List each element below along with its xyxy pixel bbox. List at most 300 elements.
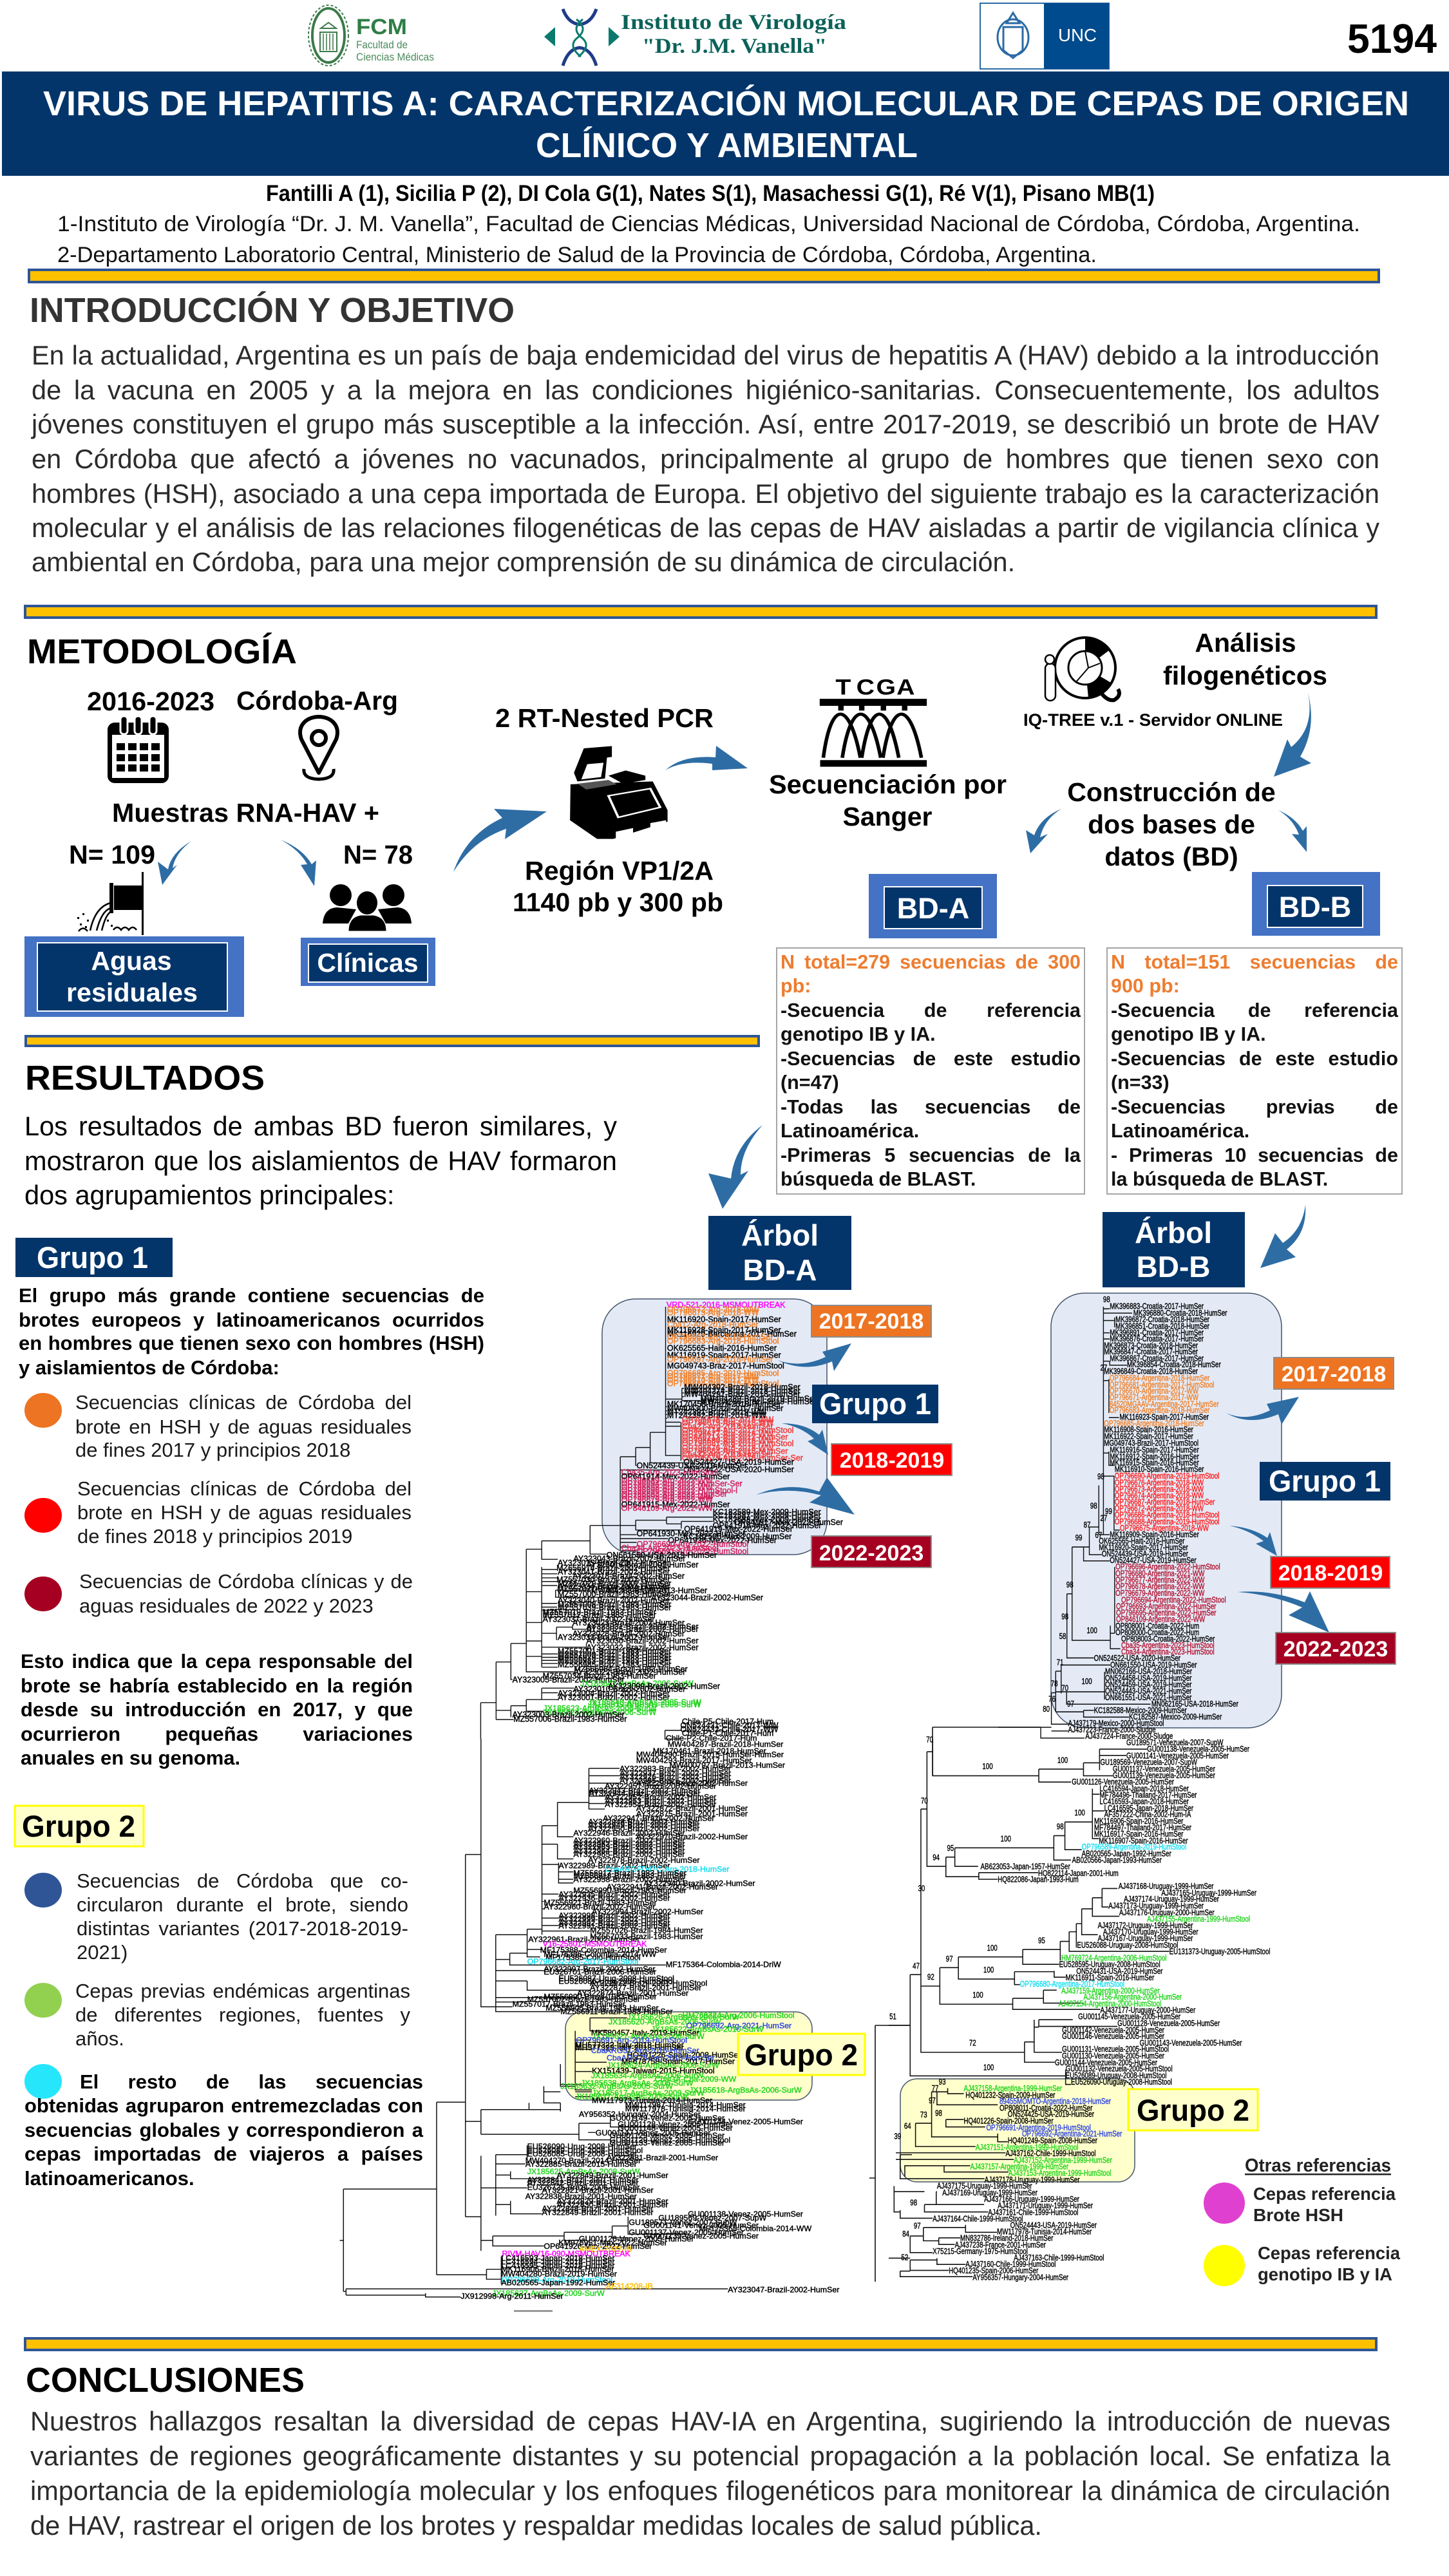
tree: BD-B phylogeny: 67 [1095, 1530, 1102, 1540]
tree: BD-A phylogeny: OP796689-Arg-2022-WW [621, 1476, 713, 1485]
text: legend cyan remainder [24, 2070, 424, 2190]
tree: BD-A phylogeny: AY323004-Brazil-2002-HumSer [558, 1689, 670, 1698]
label: samples: Muestras RNA-HAV + [112, 798, 379, 828]
tree: BD-A phylogeny: MW404290-Brazil-2015-HumSer-HumSer [636, 1750, 784, 1759]
text: legend red: Secuencias clínicas de Córdoba del [77, 1477, 412, 1500]
tree: BD-B phylogeny: AJ437162-Chile-1999-HumStool [1005, 2149, 1096, 2158]
tree: BD-A phylogeny: OP796685-Arg-2019-HumStool [667, 1369, 779, 1378]
tree: BD-B phylogeny: 95 [947, 1844, 954, 1853]
tree: BD-A phylogeny: JX185625-ArgBsAs-2008-SurW [527, 2167, 640, 2176]
divider bar 2 [25, 606, 1376, 618]
tree: BD-A phylogeny: AY322940-Brazil-2002-HumSer [643, 1879, 755, 1888]
tree: BD-B phylogeny: GU001139-Venezuela-2005-HumSer [1113, 1770, 1215, 1780]
tree: BD-A phylogeny: MZ556911-Brazil-1983-HumSer [560, 2007, 673, 2016]
tree: BD-B phylogeny: OP796696-Argentina-2022-HumStool [1115, 1562, 1220, 1572]
title banner: CLÍNICO Y AMBIENTAL [536, 126, 918, 165]
tree: BD-A phylogeny: OP641919-Mex-2022-HumSer [684, 1525, 793, 1534]
tree: BD-B phylogeny: MK116911-Spain-2016-HumSer [1066, 1973, 1154, 1982]
box: BD-A [869, 874, 997, 938]
tree: BD-B phylogeny: AB020566-Japan-1993-HumSer [1072, 1855, 1162, 1865]
tree: BD-A phylogeny: MK116920-Spain-2017-HumSer [667, 1315, 781, 1324]
tree: BD-B phylogeny: MF784497-Thailand-2017-HumSer [1094, 1823, 1191, 1832]
tree: BD-A phylogeny: OP796679-Arg-2022-WW [621, 1495, 713, 1504]
title box: arbol BD-A: BD-A [743, 1253, 817, 1287]
tree: BD-A phylogeny: MH577323-Italy-2018-HumSer [575, 2043, 684, 2052]
badge: grupo 1 left [15, 1238, 173, 1277]
tree: BD-B phylogeny: EU526090-Uruguay-2008-HumStool [1071, 2078, 1172, 2087]
icon: Sanger chromatogram [820, 675, 927, 767]
title banner [2, 71, 1449, 176]
tree: BD-A phylogeny: Chile-P2-Chile-2017-Hum [666, 1734, 757, 1743]
tree: BD-A phylogeny: MF678758-Spain-2017-HumSer [621, 2057, 735, 2066]
tree: BD-A phylogeny: VRD-521-2016-MSMOUTBREAK [667, 1300, 786, 1309]
panel: BD-B description [1106, 947, 1403, 1195]
label: construccion [1067, 777, 1276, 871]
tree: BD-A phylogeny: OP796680-Arg-2018-WW [682, 1436, 774, 1445]
tree: BD-B phylogeny: 100 [987, 1943, 998, 1953]
badge: 2017-2018 tree A [811, 1305, 931, 1337]
box: BD-B: BD-B [1279, 891, 1351, 923]
panel: BD-A description: -Todas las secuencias de [781, 1096, 1081, 1118]
text: conclusiones: importancia de la epidemiología molecular y los enfoques filogenéticos para monitorear la dinámica de circulación [30, 2476, 1390, 2506]
tree: BD-A phylogeny: MZ556918-Brazil-1983-HumSer [573, 1871, 687, 1880]
tree: BD-B phylogeny: MK116908-Spain-2016-HumSer [1104, 1425, 1193, 1435]
tree: BD-B phylogeny: OP796670-Argentina-2017-WW [1110, 1386, 1198, 1396]
tree: BD-A phylogeny: MZ557012-Brazil-1983-HumSer [543, 1611, 656, 1620]
tree: BD-A phylogeny: MF175385-Colo-HumStool [545, 1953, 640, 1962]
tree: BD-A phylogeny: OP796698-Arg-2022-WW [621, 1483, 713, 1492]
tree: BD-A phylogeny: AY322948-Brazil-2002-HumSer [588, 1817, 699, 1826]
text: legend dark red: Secuencias de Córdoba clínicas y de [79, 1570, 413, 1593]
arrow: analysis to databases [1274, 693, 1311, 777]
tree: BD-A phylogeny: AY322937-Brazil-2002-HumSer [620, 1768, 731, 1777]
tree: BD-A phylogeny: MW404288-Brazil-2019-HumSer [701, 1397, 817, 1406]
text: introduccion: En la actualidad, Argentina es un país de baja endemicidad del virus de hepatitis A (HAV) debido a la introducción [32, 340, 1379, 370]
text: introduccion: ambiental en Córdoba, para una mejor comprensión de su dinámica de circulación. [32, 547, 1015, 577]
tree: BD-B phylogeny: 95 [1038, 1936, 1045, 1946]
legend: otras referencias: Cepas referencia [1258, 2243, 1400, 2263]
tree: BD-B phylogeny: GU001130-Venezuela-2005-HumSer [1062, 2051, 1164, 2061]
tree: BD-A phylogeny: JX185640-ArgBsAs-2005-SurW [588, 1698, 701, 1707]
tree: BD-B phylogeny: 98 [1057, 1822, 1064, 1832]
text: legend red [77, 1477, 412, 1548]
tree: BD-B phylogeny: ON661551-USA-2021-HumSer [1105, 1693, 1192, 1702]
tree: BD-A phylogeny: AY323028-Brazil-2002-HumSer [573, 1629, 685, 1638]
tree: BD-A phylogeny: OP641936-Mex-2022-HumSer [668, 1536, 777, 1545]
panel: BD-A description: -Primeras 5 secuencias de la [781, 1144, 1081, 1166]
arrow: to wastewater [158, 841, 191, 885]
tree: BD-B phylogeny: OP796692-Argentina-2021-HumSer [1022, 2129, 1122, 2139]
tree: BD-B phylogeny: 47 [913, 1962, 920, 1971]
text: legend red: brote en HSH y de aguas residuales [77, 1501, 412, 1524]
tree: BD-A phylogeny: MW404280-Brazil-2019-HumSer [501, 2269, 617, 2278]
tree: BD-A phylogeny: MK116929-Barcelona-2017-HumSer [667, 1329, 797, 1338]
tree: BD-A phylogeny: AF314208-IB [606, 2282, 653, 2291]
tree: BD-B phylogeny: 70 [921, 1796, 928, 1806]
tree: BD-B phylogeny: AJ437158-Argentina-1999-HumSer [964, 2084, 1062, 2093]
tree: BD-A phylogeny: OK625565-Haiti-2016-HumSer [667, 1343, 777, 1352]
tree: BD-A phylogeny: GU001149-Venez-2005-HumSer [610, 2114, 724, 2123]
text: legend green: Cepas previas endémicas argentinas [75, 1980, 410, 2002]
tree: BD-A phylogeny: MZ556905-Brazil-1983-HumSer [545, 2003, 659, 2012]
icon: wastewater pipe [77, 872, 144, 935]
tree: BD-A phylogeny: KC182587-Mex-2009-HumSer [713, 1511, 821, 1520]
tree: BD-A phylogeny: KX151439-Taiwan-2015-HumStool [592, 2066, 715, 2075]
box: aguas residuales: residuales [66, 978, 198, 1007]
title box: arbol BD-A: Árbol [741, 1218, 819, 1252]
tree: BD-A phylogeny: OP796689-Arg-2019-HumStool [501, 2275, 612, 2284]
tree: BD-A phylogeny: JX185624-ArgBsAs-2006-SurW [607, 2061, 719, 2070]
legend dot: cyan [24, 2064, 62, 2099]
tree: BD-A phylogeny: AY322947-Brazil-2002-HumSer [603, 1814, 714, 1823]
tree: BD-B phylogeny: ON661550-USA-2019-HumSer [1110, 1660, 1197, 1670]
tree: BD-A phylogeny: CbaGA-Cba-2009-WW [655, 2075, 736, 2084]
tree: BD-A phylogeny: KM975951-Mex-2022-HumSer [558, 2238, 667, 2247]
tree: BD-A phylogeny: MZ557000-Brazil-1983-HumSer [558, 1590, 671, 1599]
tree: BD-A phylogeny: MZ557001-Brazil-1983-HumSer [558, 1647, 671, 1656]
tree: BD-B phylogeny: AJ437172-Uruguay-1999-HumSer [1098, 1920, 1193, 1930]
badge: grupo 1 left: Grupo 1 [37, 1240, 148, 1274]
tree: BD-A phylogeny: LC416595-Japan-2018-HumSer [501, 2261, 614, 2270]
badge: 2017-2018 tree B [1274, 1358, 1394, 1389]
tree: BD-B phylogeny: HQ401249-Spain-2008-HumSer [1008, 2136, 1097, 2145]
tree: BD-B phylogeny: 99 [1075, 1533, 1082, 1543]
tree: BD-A phylogeny: JX185638-ArgBsAs-2006-SurW [581, 2078, 694, 2087]
tree: BD-A phylogeny: AY322997-Brazil-2002-HumSer [544, 1965, 656, 1974]
tree: BD-B phylogeny: KC182587-Mexico-2009-HumSer [1129, 1712, 1222, 1722]
tree: BD-B phylogeny: MN062165-USA-2018-HumSer [1151, 1700, 1238, 1709]
tree: BD-A phylogeny: AY323025-Brazil-2002-HumSer [587, 1625, 699, 1634]
label: location: Córdoba-Arg [236, 686, 398, 715]
legend: otras referencias: genotipo IB y IA [1258, 2264, 1392, 2284]
tree: BD-A phylogeny: MF175386-Colombia-2014-WW [544, 1950, 656, 1959]
tree: BD-B phylogeny: 78 [1051, 1679, 1058, 1689]
label: RT-Nested PCR: 2 RT-Nested PCR [495, 703, 714, 733]
tree: BD-A phylogeny: AY323043-Brazil-2002-HumSer [573, 1555, 685, 1564]
tree: BD-B phylogeny: 97 [946, 1955, 953, 1964]
tree: BD-A phylogeny: JX185627-ArgBsAs-2009-SurW [492, 2289, 605, 2298]
tree: BD-A phylogeny: HQ401226-Spain-2008-HumSer [627, 2050, 741, 2060]
legend dot: red [24, 1498, 62, 1533]
tree: BD-B phylogeny: 98 [1103, 1294, 1110, 1304]
tree: BD-B phylogeny: OP796679-Argentina-2022-WW [1115, 1588, 1204, 1598]
tree: BD-A phylogeny: OP796684-Arg-2018-HumSer [682, 1447, 788, 1456]
tree: BD-B phylogeny: OP796681-Argentina-2017-HumStool [1110, 1380, 1214, 1390]
panel: BD-A description: pb: [781, 975, 811, 997]
arrow: tree A to 2022-2023 [756, 1477, 855, 1515]
arrow: tree B to 2018-2019 [1229, 1526, 1277, 1556]
tree: BD-A phylogeny: GU001129-Venez-2005-HumSer [610, 2131, 724, 2140]
divider bar 4 [25, 2338, 1376, 2350]
tree: BD-A phylogeny: GU001148-Venez-2005-HumSer [618, 2123, 733, 2132]
tree: BD-A phylogeny: MZ556917-Brazil-1983-HumSer [573, 1868, 687, 1877]
tree: BD-B phylogeny: AJ437238-France-2001-HumSer [955, 2240, 1046, 2249]
panel: BD-A description: N total=279 secuencias de 300 [781, 951, 1081, 973]
tree: BD-A phylogeny: GU001133-Venez-2005-HumSer [610, 2138, 724, 2147]
arrow: tree A to 2018-2019 [782, 1423, 828, 1455]
tree: BD-A phylogeny: OP796676-Arg-2018-WW [682, 1443, 774, 1452]
tree: BD-A phylogeny: AY322972-Brazil-2001-HumStool [590, 1978, 707, 1987]
tree: BD-A phylogeny: MZ556983-Brazil-1983-HumSer [558, 1656, 671, 1665]
tree: BD-A phylogeny: GU001144-Venez-2005-HumSer [688, 2117, 803, 2126]
tree: BD-A phylogeny: AY323040-Brazil-2002-HumSer [558, 1596, 670, 1605]
legend dot: green [24, 1983, 62, 2018]
legend dot: orange [24, 1393, 62, 1428]
tree: BD-B phylogeny: 84 [902, 2230, 909, 2239]
tree: BD-B phylogeny: 98 [935, 2108, 942, 2118]
tree: BD-A phylogeny: MF175388-Colombia-2014-HumSer [540, 1946, 667, 1955]
tree: BD-A phylogeny: MW404283-Brazil-2013-HumSer [591, 1586, 707, 1595]
tree: BD-B phylogeny: MK116922-Spain-2017-HumSer [1104, 1432, 1193, 1441]
tree: BD-A phylogeny: GU001141-Venez-2005-HumSer [643, 2221, 759, 2230]
heading: introduccion: INTRODUCCIÓN Y OBJETIVO [30, 291, 515, 330]
tree: BD-A phylogeny: AY322875-Brazil-2001-HumSer [636, 1810, 748, 1819]
tree: BD-A phylogeny: LC416593-Japan-2018-HumSer [501, 2253, 614, 2262]
highlight: grupo 2 region tree B [900, 2079, 1135, 2182]
tree: BD-A phylogeny: AY322965-Brazil-2002-HumSer [573, 1850, 685, 1859]
tree: BD-A phylogeny: AY322935-Brazil-2002-HumSer [558, 1890, 670, 1899]
text: introduccion [31, 340, 1379, 577]
tree: BD-A phylogeny: AY322849-Brazil-2001-HumSer [556, 2171, 668, 2180]
tree: BD-B phylogeny: GU001145-Venezuela-2005-HumSer [1078, 2012, 1180, 2022]
tree: BD-A phylogeny: AY323005-Brazil-2002-HumSer [513, 1676, 625, 1685]
arrow: panel B to tree B [1260, 1205, 1305, 1268]
tree: BD-B phylogeny: GU001143-Venezuela-2005-HumSer [1140, 2038, 1242, 2048]
tree: BD-A phylogeny: AY322961-Brazil-2002-HumSer [528, 1935, 639, 1944]
tree: BD-A phylogeny: MK170458-Brazil-2018-HumSer [667, 1399, 781, 1408]
tree: BD-A phylogeny: AY322950-Brazil-2002-HumSer [588, 1824, 699, 1833]
tree: BD-A phylogeny: OP641917-Mex-2022-HumSer [734, 1518, 843, 1527]
text: resultados intro: Los resultados de ambas BD fueron similares, y [24, 1111, 617, 1141]
label: IQ-TREE: IQ-TREE v.1 - Servidor ONLINE [1023, 710, 1283, 730]
tree: BD-A phylogeny: AY322946-Brazil-2002-HumSer [573, 1828, 685, 1837]
text: legend cyan remainder: cepas importadas de viajeros a países [24, 2143, 423, 2165]
text: grupo 1 description [19, 1284, 484, 1379]
tree: BD-A phylogeny: MZ557017-Brazil-1983-HumSer [513, 2000, 625, 2009]
tree: BD-A phylogeny: OP796672-Arg-2018-WW [667, 1305, 759, 1314]
tree: BD-A phylogeny: AY323033-Brazil-2002-HumSer [558, 1633, 670, 1642]
tree: BD-B phylogeny: 98 [1061, 1612, 1068, 1622]
text: legend blue: circularon durante el brote, siendo [77, 1893, 408, 1916]
tree: BD-A phylogeny: KC182586-Mex-2009-HumSer [683, 1532, 791, 1541]
tree: BD-A phylogeny: MZ656974-Brazil-2002-HumSer [556, 1564, 670, 1573]
tree: BD-A phylogeny: Cba34-Arg-2023-HumStool [621, 1544, 718, 1553]
tree: BD-B phylogeny: HM769724-Argentina-2006-HumStool [1061, 1953, 1166, 1963]
tree: BD-B phylogeny: 97 [929, 2096, 936, 2105]
tree: BD-A phylogeny: LC416594-Japan-2018-HumSer [501, 2257, 614, 2266]
tree: BD-A phylogeny: AY322874-Brazil-2001-HumSer [577, 1989, 688, 1998]
tree: BD-B phylogeny: ON524443-USA-2021-HumSer [1105, 1687, 1192, 1696]
tree: BD-A phylogeny: MF175364-Colombia-2014-DriW [666, 1960, 781, 1969]
tree: BD-B phylogeny: EU526089-Uruguay-2008-HumStool [1066, 2071, 1167, 2080]
text: resultados intro [24, 1111, 617, 1210]
tree: BD-A phylogeny: JX185624-ArgBsAs-2006-SurW [544, 1708, 656, 1717]
tree: BD-A phylogeny: AY323031-Brazil-2002-HumSer [587, 1622, 699, 1631]
label: sizes: 1140 pb y 300 pb [513, 887, 723, 917]
tree: BD-A phylogeny: OP796683-Arg-2018-HumStool [667, 1336, 779, 1345]
divider bar 3 [26, 1036, 759, 1046]
tree: BD-B phylogeny: OP808000-Croatia-2022-Hum [1115, 1628, 1199, 1637]
tree: BD-A phylogeny: ON661550-USA-2019-HumSer [607, 1551, 717, 1560]
tree: BD-A phylogeny: JX185622-ArgBsAs-2010-SurW [651, 2025, 764, 2034]
tree: BD-A phylogeny: AY322985-Brazil-2002-HumSer [620, 1776, 731, 1785]
tree: BD-B phylogeny: OP796671-Argentina-2017-WW [1110, 1393, 1198, 1402]
tree: BD-A phylogeny: OP641930-Mex-2022-HumSer [637, 1529, 745, 1538]
tree: BD-B phylogeny: EU131373-Uruguay-2005-HumStool [1170, 1947, 1271, 1956]
tree: BD-B phylogeny: AJ437175-Uruguay-1999-HumSer [937, 2181, 1032, 2191]
tree: BD-A phylogeny: AY323041-Brazil-2002-HumSer [558, 1567, 670, 1577]
text: legend green: años. [75, 2027, 124, 2050]
tree: BD-B phylogeny: OP796680-Argentina-2017-HumStool [1020, 1980, 1124, 1989]
tree: BD-A phylogeny: MK580457-Italy-2019-HumSer [591, 2028, 699, 2037]
logo: FCM Facultad de Ciencias Medicas: Facultad de [356, 39, 408, 51]
tree: BD-B phylogeny: MW117978-Tunisia-2014-HumSer [997, 2227, 1092, 2237]
tree: BD-B phylogeny: AJ437163-Chile-1999-HumStool [1014, 2253, 1104, 2262]
tree: BD-B phylogeny: GU001126-Venezuela-2005-HumSer [1072, 1777, 1174, 1787]
tree: BD-B phylogeny: 73 [920, 2110, 927, 2119]
tree: BD-B phylogeny: GU001138-Venezuela-2005-HumSer [1147, 1745, 1249, 1754]
tree: BD-A phylogeny: MZ557033-Brazil-1983-HumSer [590, 1932, 703, 1941]
tree: BD-B phylogeny: 98 [1066, 1580, 1074, 1589]
box: clinicas: Clínicas [317, 948, 419, 978]
tree: BD-A phylogeny: JX185621-ArgBsAs-2006-SurW [592, 2032, 705, 2041]
tree: BD-B phylogeny: 98 [1090, 1501, 1097, 1511]
tree: BD-A phylogeny: AY322952-Brazil-2002-HumSer [605, 1793, 716, 1802]
label: N wastewater: N= 109 [69, 840, 155, 869]
tree: BD-B phylogeny: OP796680-Argentina-2021-WW [1115, 1569, 1204, 1578]
box: BD-B [1252, 872, 1380, 936]
panel: BD-B description: Latinoamérica. [1111, 1120, 1249, 1142]
tree: BD-B phylogeny: OP796687-Argentina-2018-HumSer [1115, 1497, 1215, 1507]
tree: BD-A phylogeny: MW404289-Brazil-2019-HumSer [701, 1394, 817, 1403]
tree: BD-B phylogeny: HQ401226-Spain-2008-HumSer [964, 2116, 1054, 2126]
text: resultados intro: mostraron que los aislamientos de HAV formaron [24, 1146, 617, 1176]
text: legend orange: de fines 2017 y principios 2018 [75, 1439, 350, 1461]
tree: BD-A phylogeny: JX185626-ArgBsAs-2006-SurW [627, 2012, 740, 2022]
tree: BD-B phylogeny: 89455MOMTO-Argentina-2018-HumSer [999, 2097, 1111, 2107]
arrow: tree A to 2017-2018 [777, 1343, 851, 1371]
tree: BD-B phylogeny: MK396876-Croatia-2017-HumSer [1110, 1334, 1204, 1343]
tree: BD-B phylogeny: AF357222-China-2002-Hum-IA [1104, 1810, 1191, 1819]
tree: BD-B phylogeny: GU001142-Venezuela-2005-HumSer [1062, 2025, 1164, 2035]
tree: BD-B phylogeny: OP796674-Argentina-2018-WW [1115, 1491, 1204, 1501]
tree: BD-A phylogeny: AY323034-Brazil-2002-HumSer [558, 1582, 670, 1591]
text: legend orange: brote en HSH y de aguas residuales [75, 1416, 412, 1438]
text: conclusiones [30, 2406, 1390, 2541]
tree: BD-A phylogeny: AY322885-Brazil-2015-HumSer [526, 2160, 637, 2169]
logo: FCM Facultad de Ciencias Medicas: Ciencias Médicas [356, 51, 434, 63]
label: filogeneticos: filogenéticos [1163, 661, 1327, 690]
tree: BD-B phylogeny: 52 [901, 2253, 908, 2262]
tree: BD-A phylogeny: GU001128-Venez-2005-HumSer [618, 2120, 733, 2129]
tree: BD-B phylogeny: OP808001-Croatia-2022-Hum [1115, 1622, 1199, 1631]
tree: BD-A phylogeny: JX185642-ArgBsAs-2006-SurW [580, 1679, 694, 1688]
tree: BD-A phylogeny: MK116928-Spain-2017-HumSer [667, 1326, 781, 1335]
tree: BD-A phylogeny: AY323044-Brazil-2002-HumSer [651, 1593, 763, 1602]
tree: BD-B phylogeny: OP796677-Argentina-2022-WW [1115, 1575, 1204, 1585]
text: grupo 1 interpretation: ocurrieron pequeñas variaciones [21, 1723, 413, 1745]
legend: otras referencias [1204, 2155, 1400, 2286]
tree: BD-A phylogeny: MZ556990-Brazil-1983-HumSer [573, 1886, 687, 1895]
panel: BD-A description: Latinoamérica. [781, 1120, 919, 1142]
tree: BD-B phylogeny: MK396851-Croatia-2018-HumSer [1115, 1321, 1209, 1331]
badge: 2018-2019 tree A: 2018-2019 [840, 1448, 944, 1473]
panel: BD-A description: -Secuencias de este estudio [781, 1048, 1081, 1070]
icon: PCR machine [570, 746, 668, 839]
tree: BD-A phylogeny: MZ557002-Brazil-1983-HumSer [527, 1995, 640, 2004]
text: legend green: de diferentes regiones, fuentes y [75, 2003, 410, 2026]
tree: BD-B phylogeny: 27 [1100, 1363, 1107, 1372]
tree: BD-A phylogeny: MZ556985-Brazil-1983-HumSer [558, 1660, 671, 1669]
tree: BD-A phylogeny: Cba32-Arg-2018-HumSer [682, 1450, 773, 1459]
badge: grupo 2 tree A: Grupo 2 [744, 2038, 858, 2072]
tree: BD-A phylogeny: MZ557026-Brazil-1984-HumSer [590, 1926, 703, 1935]
tree: BD-B phylogeny: EU526088-Uruguay-2008-HumStool [1077, 1940, 1178, 1950]
tree: BD-B phylogeny: 30 [918, 1884, 925, 1893]
tree: BD-A phylogeny: MW400797-Brazil-2013-HumSer [670, 1761, 785, 1770]
tree: BD-B phylogeny: AJ437177-Uruguay-2000-HumSer [1101, 2005, 1195, 2015]
tree: BD-B phylogeny: HQ822114-Japan-2001-Hum [1038, 1869, 1119, 1878]
tree: BD-B phylogeny: AJ437169-Uruguay-1999-HumSer [942, 2188, 1037, 2197]
tree: BD-B phylogeny: AJ437154-Argentina-2000-HumStool [1059, 1999, 1161, 2009]
tree: BD-B phylogeny: AJ437168-Uruguay-1999-HumSer [1119, 1882, 1214, 1891]
tree: BD-A phylogeny: EU526085-Urug-2008-HumSer [527, 2150, 637, 2159]
tree: BD-A phylogeny: JX185627-ArgBsAs-2006-SurW [575, 2092, 688, 2101]
text: grupo 1 interpretation: desde su introducción en 2017, y que [21, 1698, 413, 1721]
tree: BD-B phylogeny: 87 [1084, 1520, 1090, 1530]
tree: BD-A phylogeny: JX185634-ArgBsAs-2006-SurW [591, 2071, 704, 2080]
tree: BD-A phylogeny: CbaARGFD47C-Arg-2018-HumSer [605, 1865, 729, 1874]
box: aguas residuales: Aguas [91, 946, 172, 976]
tree: BD-B phylogeny: GU001144-Venezuela-2005-HumSer [1055, 2058, 1157, 2067]
tree: BD-A phylogeny: OP796678-Arg-2018-WW [682, 1415, 774, 1424]
badge: grupo 2 tree B: Grupo 2 [1137, 2093, 1249, 2127]
tree: BD-A phylogeny: AY323037-Brazil-2002-HumSer [543, 1615, 655, 1624]
tree: BD-A phylogeny: MZ557008-Brazil-1983-HumSer [558, 1600, 671, 1609]
tree: BD-B phylogeny: 100 [983, 2063, 994, 2072]
divider bar 1 [29, 270, 1379, 282]
tree: BD-B phylogeny: ON524439-USA-2019-HumSer [1102, 1549, 1188, 1558]
text: legend dark red: aguas residuales de 2022 y 2023 [79, 1595, 374, 1617]
tree: BD-B phylogeny: ON524427-USA-2019-HumSer [1110, 1556, 1197, 1565]
tree: BD-B phylogeny: 94 [933, 1853, 940, 1862]
tree: BD-B phylogeny: OP796676-Argentina-2018-WW [1115, 1478, 1204, 1488]
tree: BD-B phylogeny: MN832786-Ireland-2018-HumSer [960, 2233, 1054, 2243]
arrow: to clinical [281, 840, 316, 886]
heading: conclusiones: CONCLUSIONES [26, 2361, 305, 2400]
tree: BD-A phylogeny: AB020565-Japan-1992-HumSer [501, 2278, 615, 2287]
badge: 2022-2023 tree A [811, 1536, 931, 1567]
tree: BD-B phylogeny: 70 [926, 1735, 934, 1745]
tree: BD-B phylogeny: MK116916-Spain-2017-HumSer [1110, 1445, 1199, 1455]
label: region: Región VP1/2A [525, 856, 714, 886]
panel: BD-B description: 900 pb: [1111, 975, 1180, 997]
tree: BD-A phylogeny: EU526089-Urug-2008-HumStool [527, 2146, 643, 2155]
legend: otras referencias: Brote HSH [1253, 2205, 1343, 2225]
tree: BD-B phylogeny: GU189571-Venezuela-2007-SupW [1126, 1738, 1223, 1747]
tree: BD-B phylogeny: OP796695-Argentina-2022-HumSer [1116, 1608, 1217, 1618]
tree: BD-B phylogeny: OP796688-Argentina-2019-HumStool [1115, 1517, 1219, 1526]
tree: BD-A phylogeny: JX185617-ArgBsAs-2009-SurW [592, 2088, 705, 2098]
text: introduccion: de la vacuna en 2005 y a la mejora en las condiciones higiénico-sanitarias. Consecuentemente, los adultos [32, 375, 1379, 405]
badge: 2017-2018 tree A: 2017-2018 [819, 1309, 923, 1334]
tree: BD-B phylogeny: AY956357-Hungary-2004-HumSer [972, 2273, 1068, 2282]
tree: BD-B phylogeny: 97 [1067, 1700, 1074, 1709]
tree: BD-A phylogeny: AY322958-Brazil-2002-HumSer [573, 1875, 685, 1884]
tree: BD-A phylogeny: AY322991-Brazil-2002-HumSer [558, 1921, 670, 1930]
tree: BD-B phylogeny: MF784496-Thailand-2017-HumSer [1099, 1790, 1197, 1800]
tree: BD-B phylogeny: MN062166-USA-2018-HumSer [1105, 1667, 1192, 1676]
